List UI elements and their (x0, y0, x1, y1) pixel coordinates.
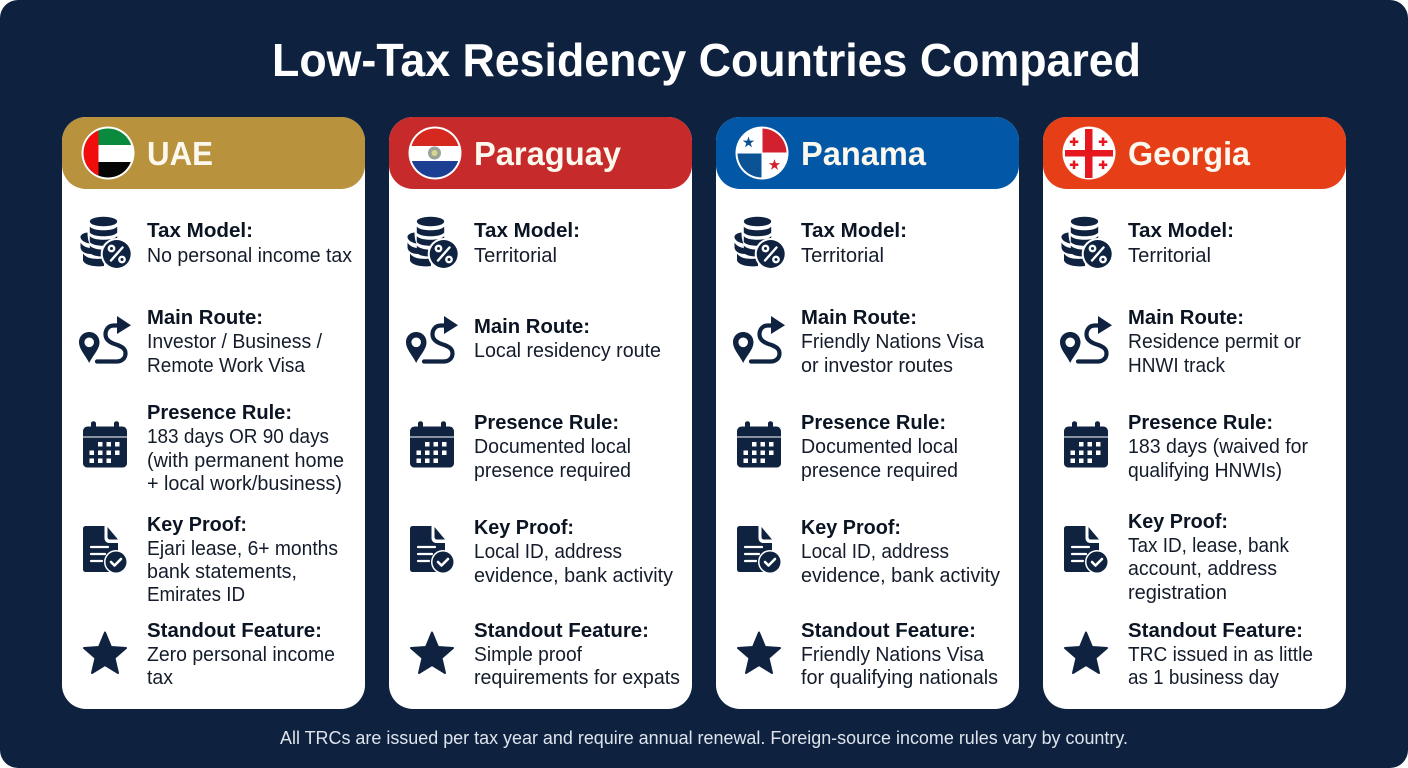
header: Georgia (1043, 117, 1346, 189)
row: tax model: Territorial (1128, 245, 1211, 267)
row: presence rule: (with permanent home (147, 450, 344, 472)
row: standout feature: requirements for expats (474, 667, 680, 689)
footer note: All TRCs are issued per tax year and require annual renewal. Foreign-source income rules vary by country. (280, 728, 1128, 748)
country name: Georgia (1128, 135, 1251, 172)
row: key proof: Tax ID, lease, bank (1128, 535, 1290, 557)
row: main route: Main Route: (147, 307, 263, 329)
row: key proof: Key Proof: (147, 514, 247, 536)
row: presence rule: qualifying HNWIs) (1128, 460, 1282, 482)
row: tax model: No personal income tax (147, 245, 352, 267)
row: key proof: Emirates ID (147, 584, 245, 606)
row: tax model: Tax Model: (474, 220, 580, 242)
row: main route: Residence permit or (1128, 331, 1301, 353)
row: key proof: evidence, bank activity (474, 565, 673, 587)
row: presence rule: presence required (474, 460, 631, 482)
row: standout feature: TRC issued in as little (1128, 644, 1313, 666)
row: key proof: evidence, bank activity (801, 565, 1000, 587)
row: presence rule (410, 412, 631, 482)
row: key proof: Local ID, address (801, 541, 949, 563)
header: UAE (62, 117, 365, 189)
row: standout feature: Standout Feature: (801, 620, 976, 642)
row: key proof: Local ID, address (474, 541, 622, 563)
row: main route: Main Route: (801, 307, 917, 329)
row: standout feature (411, 620, 680, 689)
row: standout feature: Standout Feature: (1128, 620, 1303, 642)
row: main route: Friendly Nations Visa (801, 331, 985, 353)
row: key proof: Key Proof: (801, 517, 901, 539)
row: main route: Local residency route (474, 340, 661, 362)
country name: Paraguay (474, 135, 622, 172)
row: presence rule (83, 402, 344, 495)
row: main route: Main Route: (1128, 307, 1244, 329)
row: tax model: Tax Model: (801, 220, 907, 242)
row: key proof: Key Proof: (1128, 511, 1228, 533)
row: standout feature (738, 620, 998, 689)
row: standout feature: Simple proof (474, 644, 582, 666)
row: main route: HNWI track (1128, 355, 1226, 377)
row: standout feature: tax (147, 667, 173, 689)
title: Low-Tax Residency Countries Compared (272, 34, 1141, 86)
row: standout feature: Standout Feature: (474, 620, 649, 642)
row: standout feature: as 1 business day (1128, 667, 1279, 689)
row: standout feature (1065, 620, 1313, 689)
row: key proof: Key Proof: (474, 517, 574, 539)
row: presence rule: Presence Rule: (1128, 412, 1273, 434)
panel: UAE (62, 117, 365, 709)
row: presence rule: Documented local (474, 436, 631, 458)
row: key proof (83, 514, 338, 606)
row: main route: Investor / Business / (147, 331, 322, 353)
header: Paraguay (389, 117, 692, 189)
row: main route (1060, 307, 1301, 377)
flag: Panama (736, 126, 788, 180)
row: main route: Main Route: (474, 316, 590, 338)
row: main route (79, 307, 322, 377)
row: main route: or investor routes (801, 355, 953, 377)
row: key proof (737, 517, 1000, 587)
row: presence rule: presence required (801, 460, 958, 482)
row: presence rule: 183 days (waived for (1128, 436, 1308, 458)
row: standout feature (84, 620, 335, 689)
row: tax model: Territorial (474, 245, 557, 267)
row: tax model (734, 217, 907, 270)
row: standout feature: for qualifying nationals (801, 667, 998, 689)
row: standout feature: Standout Feature: (147, 620, 322, 642)
flag: Georgia (1062, 126, 1116, 180)
country name: Panama (801, 135, 927, 172)
row: tax model (407, 217, 580, 270)
row: presence rule (737, 412, 958, 482)
row: presence rule: Documented local (801, 436, 958, 458)
row: presence rule: Presence Rule: (801, 412, 946, 434)
row: presence rule: 183 days OR 90 days (147, 426, 329, 448)
flag: UAE (82, 126, 134, 180)
row: tax model: Tax Model: (147, 220, 253, 242)
row: standout feature: Zero personal income (147, 644, 335, 666)
row: key proof: registration (1128, 582, 1227, 604)
row: key proof: bank statements, (147, 561, 297, 583)
flag: Paraguay (408, 126, 462, 180)
row: key proof (410, 517, 673, 587)
row: main route (733, 307, 985, 377)
row: main route (406, 316, 661, 363)
row: tax model (1061, 217, 1234, 270)
panel: Georgia (1043, 117, 1346, 709)
row: key proof (1064, 511, 1290, 604)
row: presence rule: Presence Rule: (474, 412, 619, 434)
header: Panama (716, 117, 1019, 189)
country name: UAE (147, 135, 213, 172)
row: presence rule: + local work/business) (147, 473, 342, 495)
panel: Paraguay (389, 117, 692, 709)
panel: Panama (716, 117, 1019, 709)
row: presence rule (1064, 412, 1308, 482)
row: standout feature: Friendly Nations Visa (801, 644, 985, 666)
row: tax model (80, 217, 352, 270)
row: key proof: account, address (1128, 558, 1277, 580)
row: main route: Remote Work Visa (147, 355, 306, 377)
row: presence rule: Presence Rule: (147, 402, 292, 424)
row: tax model: Tax Model: (1128, 220, 1234, 242)
row: tax model: Territorial (801, 245, 884, 267)
row: key proof: Ejari lease, 6+ months (147, 538, 338, 560)
